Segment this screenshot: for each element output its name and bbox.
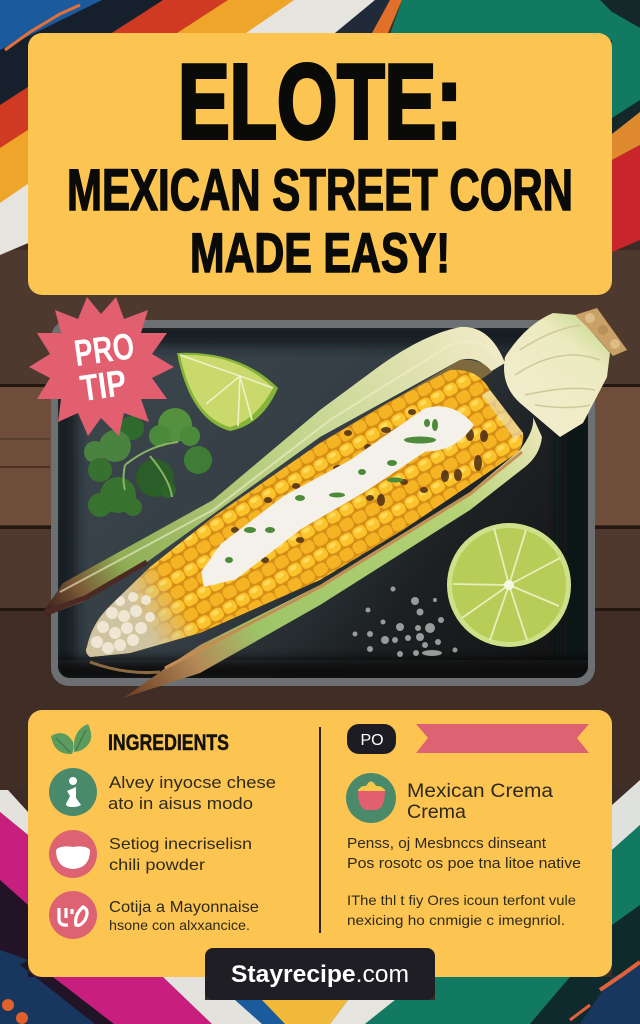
sea salt flakes bbox=[352, 586, 458, 657]
corn silk tuft bbox=[575, 308, 627, 356]
subtitle bbox=[67, 158, 573, 284]
title panel bbox=[28, 33, 612, 295]
ingredient 3 text: Cotija a Mayonnaise bbox=[109, 899, 259, 916]
crema body text: Penss, oj Mesbnccs dinseant bbox=[347, 836, 546, 852]
pro tip starburst: PRO bbox=[72, 325, 137, 374]
crema heading: Mexican Crema bbox=[407, 781, 553, 802]
serape blanket: top bbox=[0, 0, 640, 255]
ingredient 3 text: hsone con alxxancice. bbox=[109, 918, 250, 933]
icon: crema bowl bbox=[346, 773, 396, 823]
icon: info circle bbox=[49, 768, 97, 816]
heading: ingredients: INGREDIENTS bbox=[108, 730, 229, 755]
crema heading: Crema bbox=[407, 802, 466, 823]
info panel bbox=[28, 710, 612, 977]
pro tip starburst bbox=[29, 297, 174, 436]
crema and cotija topping bbox=[203, 408, 472, 585]
icon: pink badge bbox=[49, 891, 97, 939]
crema heading bbox=[407, 781, 553, 823]
ingredient 1 text: Alvey inyocse chese bbox=[109, 773, 276, 792]
ingredient 1 text: ato in aisus modo bbox=[108, 794, 253, 813]
website badge bbox=[205, 948, 435, 1000]
lime slice bbox=[447, 523, 571, 647]
crema body text bbox=[347, 836, 581, 928]
crema body text: IThe thl t fiy Ores icoun terfont vule bbox=[347, 892, 576, 908]
crema body text: nexicing ho cnmigie c imegnriol. bbox=[347, 912, 565, 928]
PO pill: PO bbox=[360, 732, 384, 749]
cilantro sprig bbox=[84, 408, 212, 517]
ingredient 2 text bbox=[109, 836, 252, 874]
ingredient 2 text: chili powder bbox=[109, 857, 206, 874]
website badge: Stayrecipe.com bbox=[231, 961, 409, 988]
title: ELOTE: ELOTE: bbox=[178, 43, 462, 161]
pink ribbon bbox=[416, 724, 589, 753]
icon: white bowl bbox=[49, 830, 97, 878]
pro tip starburst: TIP bbox=[78, 362, 129, 409]
corn cob bbox=[80, 370, 523, 660]
corn husk: upper leaf bbox=[43, 327, 505, 616]
char marks on corn bbox=[231, 409, 488, 563]
ingredient 2 text: Setiog inecriselisn bbox=[109, 836, 252, 853]
metal baking tray bbox=[50, 320, 600, 686]
corn husk: lower leaf bbox=[90, 417, 542, 698]
PO pill bbox=[347, 724, 396, 754]
ingredient 3 text bbox=[109, 899, 259, 933]
crema body text: Pos rosotc os poe tna litoe native bbox=[347, 856, 581, 872]
serape blanket: bottom bbox=[0, 780, 640, 1024]
subtitle: MADE EASY! bbox=[190, 221, 450, 284]
corn husk knot bbox=[504, 313, 610, 437]
lime wedge bbox=[177, 353, 278, 431]
ingredient 1 text bbox=[108, 773, 276, 813]
icon: leaves bbox=[51, 724, 91, 754]
